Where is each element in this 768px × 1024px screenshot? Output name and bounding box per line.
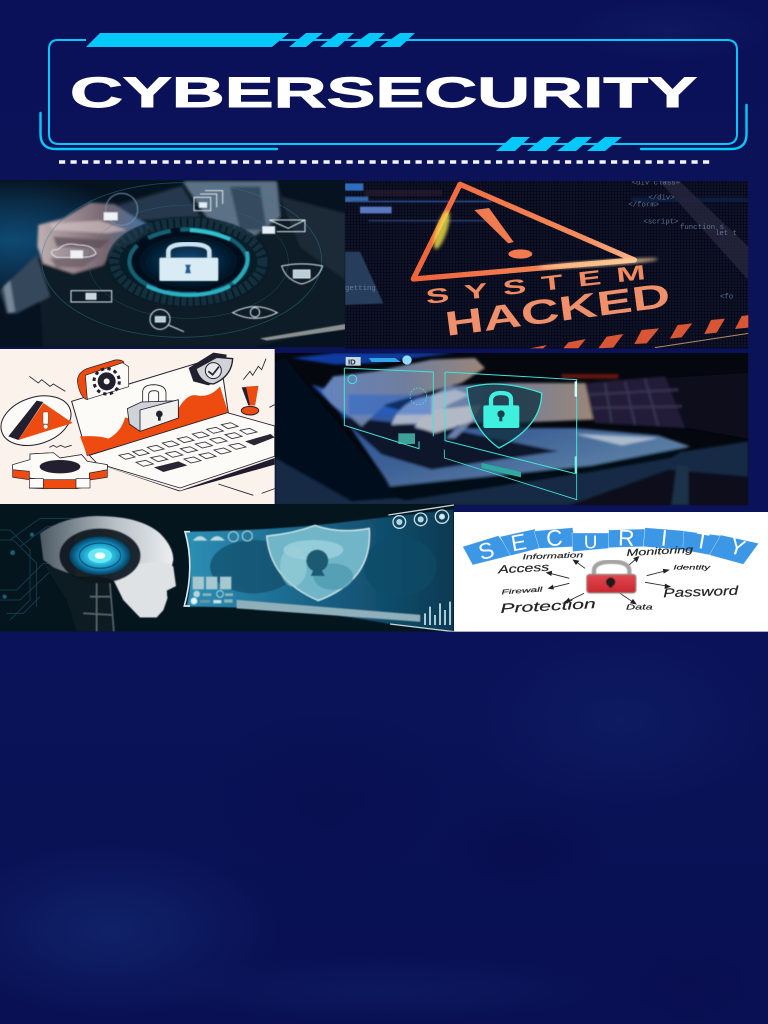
red padlock [587,562,636,593]
glowing eye [69,536,131,575]
arrow: firewall [549,583,569,589]
code text: <script> [643,218,679,226]
code text: function s [680,224,724,232]
screen panel [185,509,453,632]
word labels: Password [663,584,740,600]
word labels: Information [522,550,583,561]
id tag [346,355,412,366]
header title frame [40,33,746,162]
icon: gear settings tile [77,360,129,400]
hands [322,358,485,426]
code text: getting [345,285,376,293]
laptop base [312,385,690,486]
tile letters [475,524,749,565]
arrow: monitoring [628,557,639,566]
arrows [547,557,670,604]
dashboard widgets [191,531,252,604]
photo: hands typing with shield overlay [275,348,748,505]
word labels [496,544,740,616]
word labels: Identity [673,565,711,572]
outer rings [42,183,322,337]
arrow: password [645,582,670,588]
tile letters: C [545,524,564,551]
laptop screen [275,358,398,501]
exclamation mark [474,208,532,259]
icon: documents [194,191,223,211]
shield with keyhole [267,525,370,601]
frame outline [49,40,737,144]
arrow: information [573,560,585,568]
code text: <div class= [632,180,680,188]
security letter tiles [463,528,759,565]
icon: magnifier [150,309,184,332]
photo: AI head facing shield dashboard [0,500,454,632]
outer bracket right [641,105,746,149]
word labels: Firewall [501,586,544,596]
central padlock [159,244,218,281]
icon: shield [282,264,323,284]
dotted divider [59,160,710,164]
outer bracket left [40,113,277,149]
left sleeve [0,255,50,313]
warning triangle [413,184,634,279]
code text: <fo [720,293,733,301]
code text: </form> [628,202,659,210]
tile letters: E [509,528,528,556]
arrow: identity [647,569,669,576]
photo: hand touching security lock hologram [0,180,345,347]
laptop keyboard base [90,458,275,491]
padlock [127,385,178,431]
hand [37,203,152,273]
hazard stripes [527,315,750,350]
tile letters: I [660,524,669,551]
hacked text: HACKED [443,277,672,344]
satellite icons [51,191,323,332]
bottom slashes [496,137,622,151]
icon: warning bubble [0,387,77,454]
arrow: data [620,593,636,604]
squiggles [29,359,275,495]
icon: big gear [13,453,107,489]
arrow: access [547,571,569,578]
mini bar chart [425,602,450,625]
icon: cloud [51,244,96,258]
top bar and slashes [86,33,415,47]
word labels: Access [496,562,550,576]
tablet edge [260,324,345,341]
robot head [40,516,176,632]
icon: check shield [189,353,233,385]
icon: monitor [71,291,112,302]
id tag: ID [348,357,356,366]
circuit lines [0,518,77,620]
icon: envelope [263,220,305,233]
word labels: Protection [500,596,596,616]
code text: let t [715,230,737,238]
desk [275,441,748,505]
word labels: Data [626,603,653,612]
illustration: laptop security isometric [0,349,275,504]
tile letters: U [584,532,597,553]
shield lock [467,384,542,448]
system text: SYSTEM [425,259,662,309]
arrow: protection [565,593,584,602]
tile letters: R [618,524,635,551]
holographic panels [344,368,577,500]
photo: system hacked warning [345,180,750,350]
photo: security word diagram [454,512,768,632]
tile letters: S [475,536,497,565]
keyboard keys [119,423,257,466]
code text [345,180,737,301]
tile letters: Y [726,532,749,561]
tile letters: T [693,526,711,554]
lock dial [107,217,270,307]
icon: globe [104,193,138,225]
gauge circles [393,510,449,528]
icon: eye [233,307,277,318]
chart screen [72,356,228,455]
sleeve [666,373,748,438]
title: CYBERSECURITY [70,70,697,117]
word labels: Monitoring [626,544,694,559]
icon: exclamation mark [241,386,259,415]
suit jacket [37,180,345,347]
code text: </div> [648,194,675,202]
shirt and tie [183,182,280,237]
